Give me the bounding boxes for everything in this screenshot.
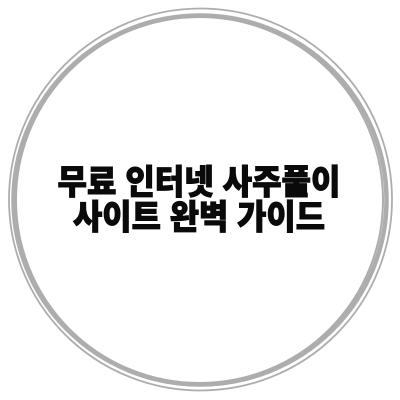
title bbox=[58, 164, 340, 237]
title line 2: 사이트 완벽 가이드 bbox=[73, 199, 325, 237]
title line 1: 무료 인터넷 사주풀이 bbox=[58, 164, 340, 202]
